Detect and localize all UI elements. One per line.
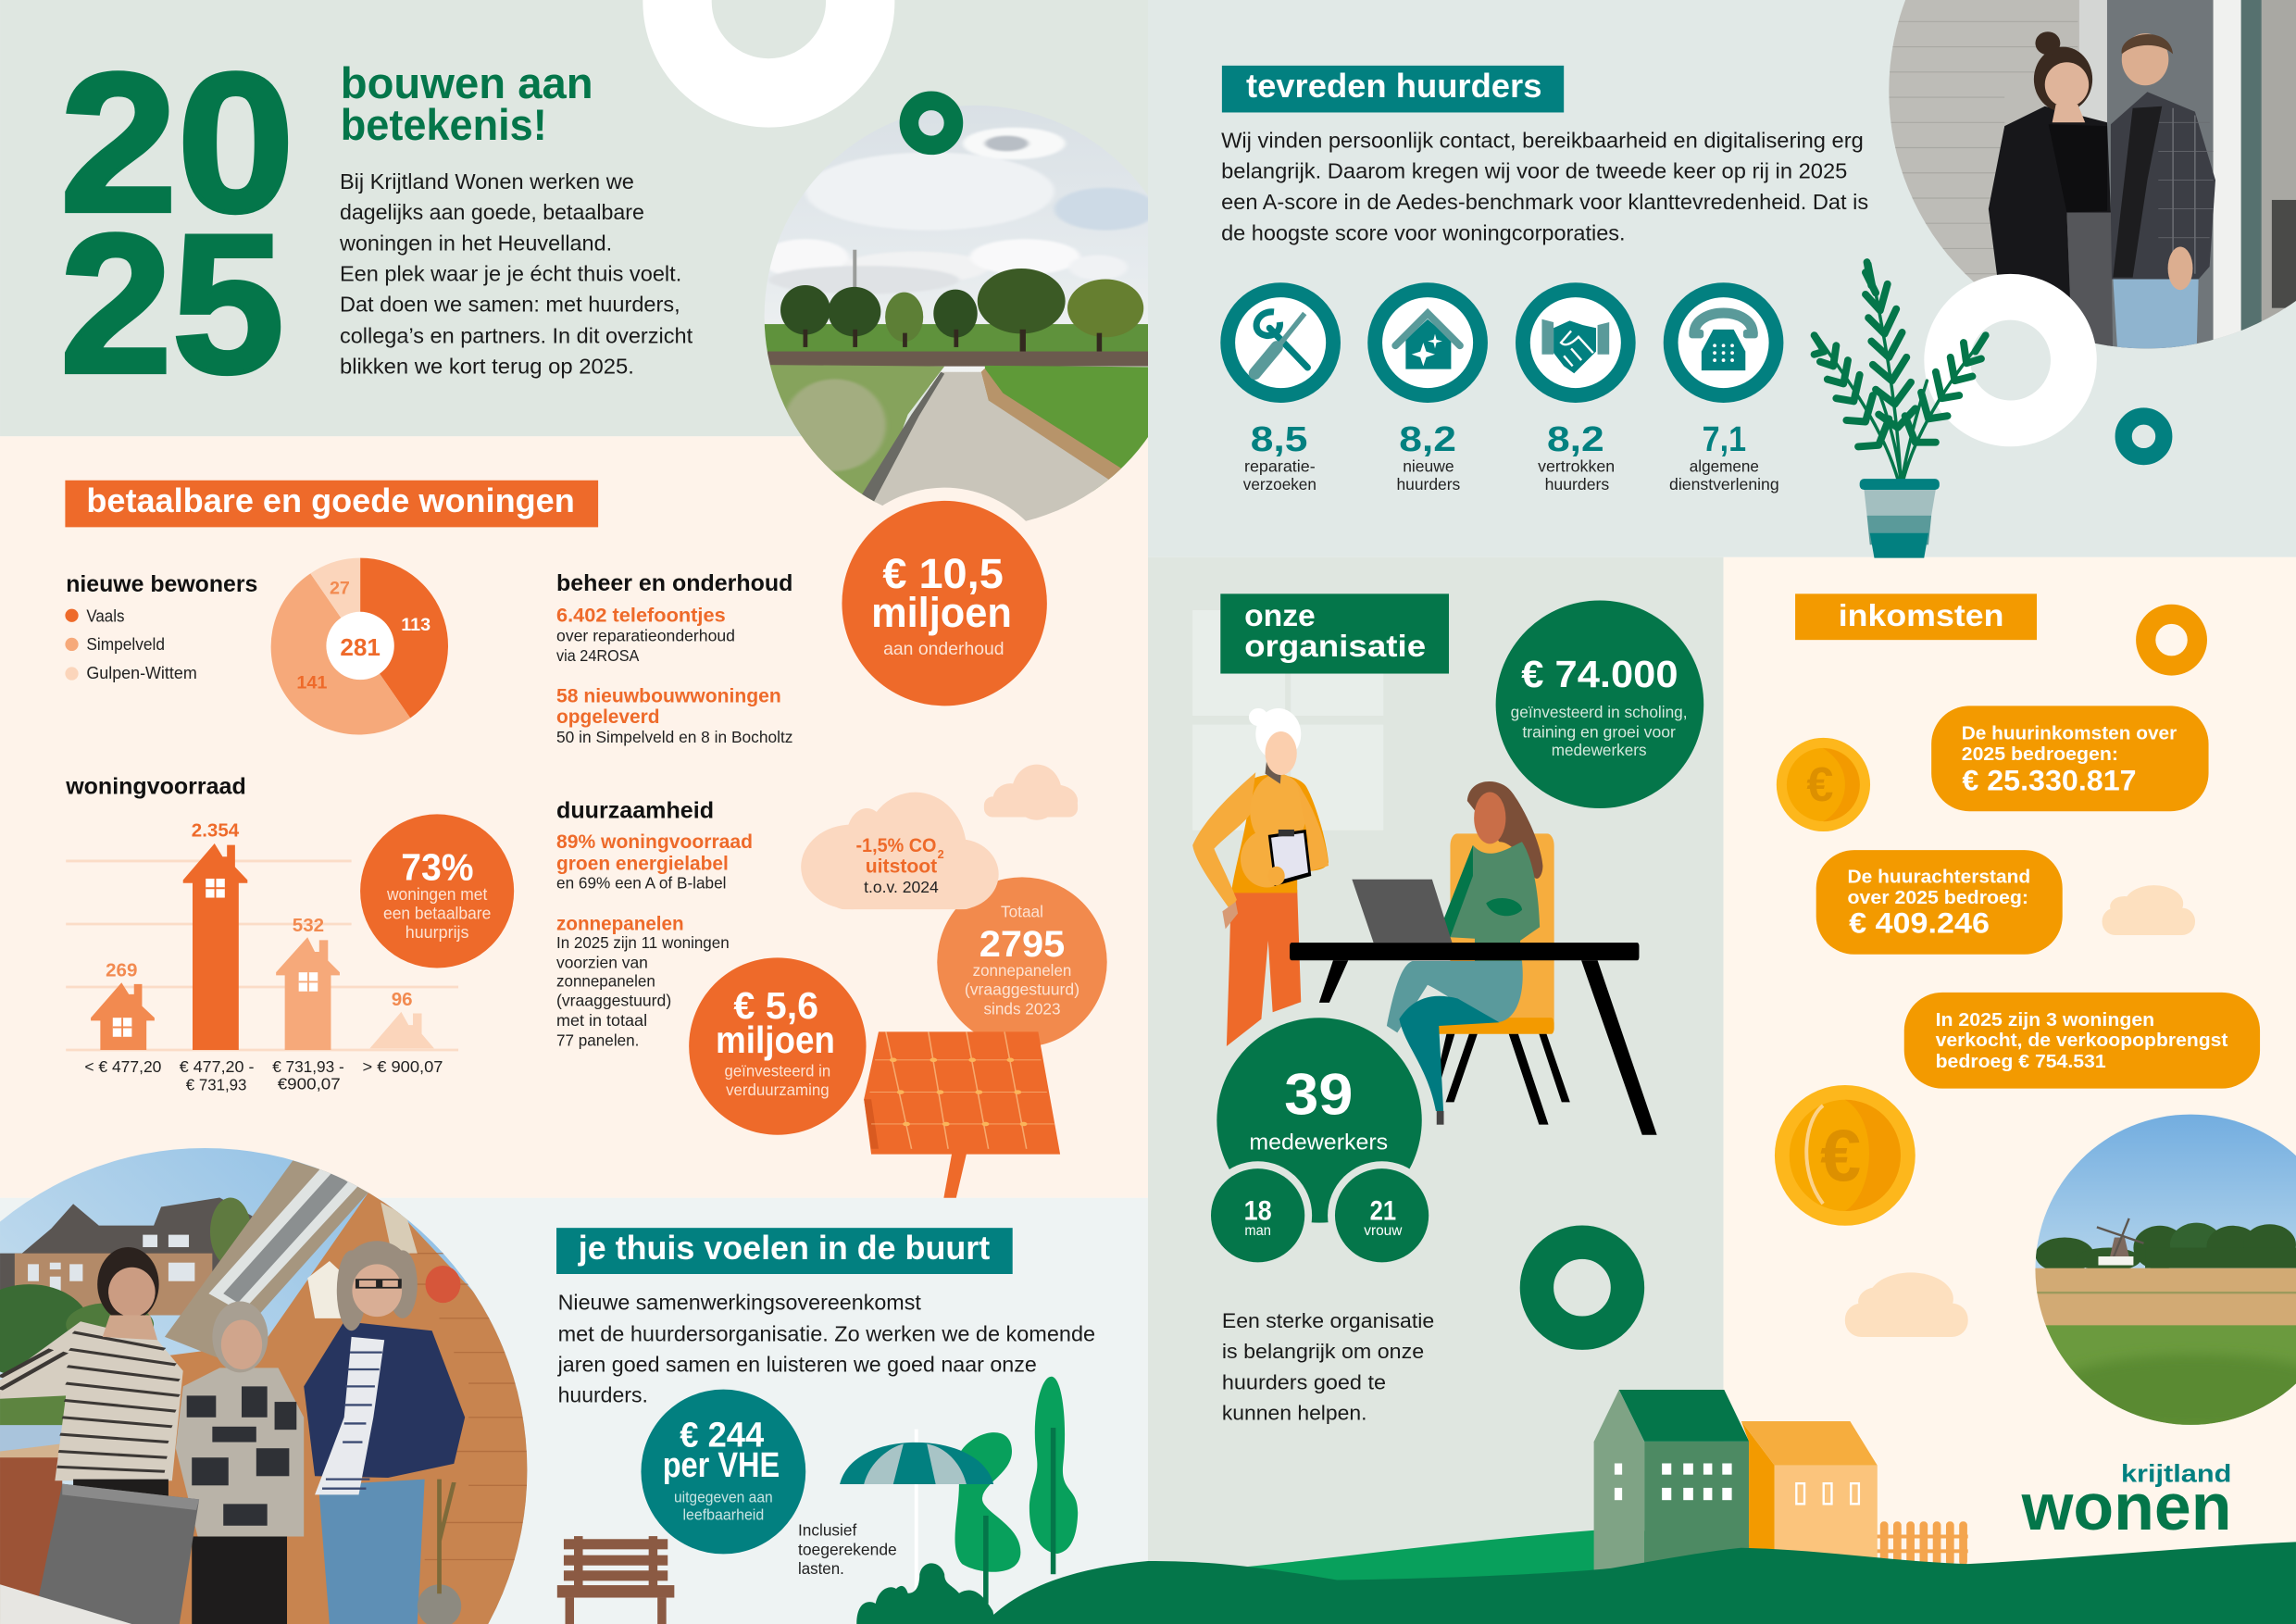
text block: duurzaamheid: 89% woningvoorraad — [556, 831, 753, 853]
chair — [33, 1484, 199, 1624]
text block: tevreden huurders: Wij vinden persoonlijk contact, bereikbaarheid en digitalisering erg — [1221, 129, 1864, 153]
text block: duurzaamheid: met in totaal — [556, 1011, 647, 1030]
text block: sterke organisatie — [1222, 1309, 1434, 1424]
text block: duurzaamheid: groen energielabel — [556, 852, 729, 874]
icon: parasol — [840, 1430, 993, 1624]
callout: 74.000: training en groei voor — [1522, 724, 1676, 742]
panel: top right background — [1148, 0, 2296, 557]
callout: 74.000 — [1496, 600, 1703, 808]
cloud callout: -1,5% CO2: 2 — [938, 848, 944, 861]
banner: betaalbare en goede woningen: betaalbare en goede woningen — [86, 481, 575, 519]
text block: sterke organisatie: Een sterke organisatie — [1222, 1309, 1434, 1332]
left woman — [0, 1321, 183, 1480]
icon: telephone — [1671, 290, 1777, 395]
callout: 5,6 miljoen: € 5,6 — [733, 984, 818, 1027]
photo: couple at front door — [1880, 0, 2296, 360]
chair — [1430, 833, 1570, 1125]
bubble: verkoop woningen: bedroeg € 754.531 — [1936, 1051, 2106, 1072]
score: algemene dienstverlening: 7,1 — [1703, 420, 1746, 459]
legend: nieuwe bewoners — [65, 571, 257, 682]
callout: 74.000: geïnvesteerd in scholing, — [1511, 704, 1688, 721]
icon: small euro coin: € — [1806, 758, 1833, 812]
axis labels: < € 477,20 — [84, 1057, 161, 1076]
axis labels: > € 900,07 — [362, 1057, 443, 1076]
text block: tevreden huurders — [1221, 129, 1868, 244]
teal ring — [2124, 416, 2164, 456]
man — [2113, 280, 2199, 348]
callout: totaal 2795 zonnepanelen: Totaal — [1001, 903, 1043, 921]
score: vertrokken huurders: vertrokken — [1538, 456, 1615, 475]
illustration: green house — [1594, 1390, 1749, 1574]
callout: 39 medewerkers: medewerkers — [1249, 1131, 1388, 1156]
chart: woningvoorraad house bars — [84, 820, 443, 1093]
right woman — [318, 1480, 425, 1624]
pie chart: nieuwe bewoners: 141 — [296, 672, 327, 693]
bar: house 96: 96 — [392, 989, 413, 1010]
banner: inkomsten: inkomsten — [1839, 599, 2003, 633]
banner: onze organisatie: organisatie — [1244, 630, 1426, 664]
centre woman — [192, 1536, 287, 1624]
callout: 10,5 miljoen: aan onderhoud — [883, 639, 1004, 659]
decorative white ring top — [678, 0, 860, 93]
intro text: collega’s en partners. In dit overzicht — [340, 323, 693, 347]
axis labels: € 731,93 - — [272, 1057, 344, 1076]
icon: bench — [557, 1536, 674, 1624]
score: nieuwe huurders — [1375, 290, 1480, 493]
callout: totaal 2795 zonnepanelen: 2795 — [980, 924, 1065, 965]
callout: 10,5 miljoen — [829, 488, 1060, 719]
banner: onze organisatie — [1220, 593, 1449, 674]
intro text — [339, 169, 693, 379]
panel: neighbourhood background — [0, 1198, 1148, 1624]
icon: small euro coin — [1777, 738, 1870, 831]
banner: tevreden huurders: tevreden huurders — [1246, 67, 1541, 105]
woman — [2066, 213, 2113, 346]
intro text: Een plek waar je je écht thuis voelt. — [340, 261, 681, 285]
amber ring — [2146, 614, 2197, 666]
text block: samenwerkingsovereenkomst: met de huurdersorganisatie. Zo werken we de komende — [558, 1321, 1095, 1345]
panel: income background — [1724, 557, 2296, 1624]
callout: 244 per VHE: € 244 — [680, 1417, 764, 1455]
big year 2025: 20 — [60, 33, 294, 254]
panel: organisation background — [1148, 557, 1724, 1624]
note: inclusief toegerekende lasten: toegerekende — [798, 1541, 897, 1559]
intro text: dagelijks aan goede, betaalbare — [340, 200, 644, 224]
score: reparatieverzoeken: 8,5 — [1251, 420, 1307, 459]
callout: 73% — [360, 814, 514, 968]
callout: 73%: woningen met — [386, 885, 487, 904]
callout: totaal 2795 zonnepanelen: sinds 2023 — [983, 1000, 1060, 1018]
text block: beheer en onderhoud — [556, 570, 792, 746]
score: nieuwe huurders: nieuwe — [1403, 456, 1454, 475]
bubble: huurachterstand: over 2025 bedroeg: — [1848, 887, 2028, 908]
text block: tevreden huurders: een A-score in de Aedes-benchmark voor klanttevredenheid. Dat is — [1221, 190, 1868, 214]
text block: beheer en onderhoud: beheer en onderhoud — [556, 570, 792, 596]
callout: 73%: huurprijs — [406, 923, 469, 942]
text block: sterke organisatie: kunnen helpen. — [1222, 1401, 1366, 1424]
callout: 5,6 miljoen — [689, 957, 867, 1135]
ground: light green hill — [1244, 1530, 1757, 1596]
text block: beheer en onderhoud: 50 in Simpelveld en 8 in Bocholtz — [556, 728, 792, 746]
text block: beheer en onderhoud: 6.402 telefoontjes — [556, 605, 726, 627]
icon: tree blob — [955, 1432, 1020, 1604]
ground: bushes — [856, 1563, 996, 1624]
legend: nieuwe bewoners: Gulpen-Wittem — [86, 664, 197, 682]
callout: 244 per VHE — [641, 1390, 805, 1554]
intro text: Dat doen we samen: met huurders, — [340, 293, 680, 317]
callout: 39 medewerkers: 18 — [1244, 1195, 1272, 1226]
icon: large euro coin — [1775, 1085, 1915, 1226]
callout: totaal 2795 zonnepanelen — [937, 877, 1107, 1047]
photo: three women on a balcony — [0, 1139, 556, 1624]
bar: house 269: 269 — [106, 960, 137, 981]
text block: beheer en onderhoud: 58 nieuwbouwwoningen — [556, 685, 781, 707]
heading: bouwen aan betekenis: betekenis! — [341, 101, 547, 150]
big year 2025 — [60, 33, 294, 415]
bar: house 532: 532 — [293, 915, 324, 936]
plant — [1815, 262, 1987, 558]
banner: inkomsten — [1795, 593, 2037, 640]
score: algemene dienstverlening: dienstverlening — [1669, 475, 1779, 493]
callout: 244 per VHE: leefbaarheid — [682, 1506, 764, 1524]
text block: beheer en onderhoud: over reparatieonderhoud — [556, 626, 735, 644]
intro text: Bij Krijtland Wonen werken we — [340, 169, 634, 194]
bar: house 96 — [369, 989, 434, 1048]
axis labels: € 731,93 — [186, 1075, 246, 1093]
bubble: verkoop woningen: verkocht, de verkoopopbrengst — [1936, 1030, 2228, 1051]
bubble: huurachterstand — [1816, 850, 2063, 955]
callout: 244 per VHE: uitgegeven aan — [674, 1489, 773, 1506]
banner: je thuis voelen in de buurt: je thuis voelen in de buurt — [578, 1229, 990, 1267]
text block: duurzaamheid: voorzien van — [556, 953, 648, 971]
bubble: huurinkomsten: De huurinkomsten over — [1962, 723, 2177, 744]
text block: duurzaamheid — [556, 798, 753, 1049]
text block: samenwerkingsovereenkomst: jaren goed samen en luisteren we goed naar onze — [557, 1353, 1037, 1377]
solar panel — [864, 1031, 1060, 1198]
callout: totaal 2795 zonnepanelen: (vraaggestuurd) — [965, 981, 1079, 999]
plant pot — [1860, 479, 1940, 558]
cloud callout: -1,5% CO2: t.o.v. 2024 — [864, 878, 939, 896]
text block: duurzaamheid: (vraaggestuurd) — [556, 992, 671, 1010]
score: nieuwe huurders: 8,2 — [1399, 420, 1456, 459]
text block: duurzaamheid: zonnepanelen — [556, 972, 655, 991]
callout: 73%: een betaalbare — [383, 904, 491, 922]
cloud — [1845, 1272, 1968, 1337]
green ring — [1537, 1243, 1628, 1333]
score: reparatieverzoeken: verzoeken — [1243, 475, 1316, 493]
bubble: huurinkomsten: 2025 bedroegen: — [1962, 743, 2118, 765]
callout: 5,6 miljoen: verduurzaming — [726, 1081, 830, 1099]
icon: tools — [1228, 290, 1333, 395]
photo: windmill landscape — [2028, 1106, 2296, 1428]
callout: 39 medewerkers — [1204, 1006, 1436, 1269]
text block: tevreden huurders: belangrijk. Daarom kregen wij voor de tweede keer op rij in 2025 — [1221, 159, 1847, 183]
callout: 39 medewerkers: vrouw — [1364, 1223, 1403, 1239]
callout: 39 medewerkers: 39 — [1284, 1063, 1353, 1128]
axis labels: €900,07 — [278, 1075, 341, 1093]
axis labels — [84, 1057, 443, 1093]
text block: samenwerkingsovereenkomst — [557, 1290, 1095, 1407]
icon: tall tree — [1029, 1377, 1078, 1574]
callout: 39 medewerkers: man — [1244, 1223, 1271, 1239]
intro text: blikken we kort terug op 2025. — [340, 355, 634, 379]
text block: duurzaamheid: 77 panelen. — [556, 1031, 639, 1049]
bar: house 532 — [276, 915, 340, 1050]
callout: 39 medewerkers: 21 — [1370, 1195, 1396, 1226]
icon: handshake — [1523, 290, 1628, 395]
standing woman — [1192, 708, 1329, 1046]
small green ring — [909, 101, 954, 145]
logo: krijtland wonen: wonen — [2021, 1471, 2232, 1544]
note: inclusief toegerekende lasten: lasten. — [798, 1559, 844, 1578]
pie chart: nieuwe bewoners: 113 — [401, 615, 430, 635]
icon: large euro coin: € — [1820, 1114, 1861, 1196]
pie chart: nieuwe bewoners: 27 — [330, 578, 350, 598]
seated woman — [1387, 781, 1542, 1125]
legend: nieuwe bewoners: Vaals — [86, 607, 124, 626]
heading: bouwen aan betekenis: bouwen aan — [341, 59, 593, 108]
cloud — [2103, 885, 2195, 935]
score: algemene dienstverlening — [1669, 290, 1779, 493]
bubble: huurachterstand: De huurachterstand — [1848, 867, 2030, 888]
text block: sterke organisatie: huurders goed te — [1222, 1370, 1386, 1393]
legend: nieuwe bewoners: Simpelveld — [86, 635, 165, 654]
illustration: fence — [1878, 1521, 1968, 1566]
text block: duurzaamheid: In 2025 zijn 11 woningen — [556, 933, 730, 952]
note: inclusief toegerekende lasten: Inclusief — [798, 1520, 856, 1539]
text block: sterke organisatie: is belangrijk om onze — [1222, 1340, 1424, 1363]
panel: affordable homes background — [0, 436, 1148, 1198]
text block: tevreden huurders: de hoogste score voor woningcorporaties. — [1221, 220, 1626, 244]
legend: nieuwe bewoners: nieuwe bewoners — [66, 571, 257, 597]
bar: house 2.354: 2.354 — [192, 820, 240, 842]
score: reparatieverzoeken: reparatie- — [1244, 456, 1316, 475]
bubble: verkoop woningen — [1904, 993, 2260, 1089]
bar: house 2.354 — [183, 820, 247, 1050]
text block: beheer en onderhoud: via 24ROSA — [556, 646, 640, 665]
bubble: huurinkomsten — [1931, 706, 2209, 811]
score: algemene dienstverlening: algemene — [1690, 456, 1759, 475]
heading: bouwen aan betekenis — [341, 59, 593, 150]
callout: 74.000: € 74.000 — [1521, 653, 1678, 695]
pie chart: nieuwe bewoners — [271, 558, 448, 735]
text block: duurzaamheid: zonnepanelen — [556, 912, 684, 934]
big year 2025: 25 — [60, 194, 284, 415]
score: reparatieverzoeken — [1228, 290, 1333, 493]
bubble: verkoop woningen: In 2025 zijn 3 woningen — [1936, 1009, 2154, 1031]
illustration: office scene — [1192, 610, 1657, 1135]
text block: duurzaamheid: duurzaamheid — [556, 798, 714, 824]
intro text: woningen in het Heuvelland. — [339, 231, 612, 255]
score: vertrokken huurders — [1523, 290, 1628, 493]
bar: house 269 — [91, 960, 155, 1050]
callout: 244 per VHE: per VHE — [663, 1446, 780, 1485]
logo: krijtland wonen: krijtland — [2121, 1460, 2231, 1488]
callout: 5,6 miljoen: geïnvesteerd in — [725, 1061, 830, 1080]
illustration: amber house — [1741, 1421, 1878, 1574]
white ring by plant — [1947, 297, 2074, 423]
text block: beheer en onderhoud: opgeleverd — [556, 706, 660, 728]
note: inclusief toegerekende lasten — [798, 1520, 897, 1578]
text block: samenwerkingsovereenkomst: Nieuwe samenwerkingsovereenkomst — [558, 1290, 921, 1314]
score: vertrokken huurders: huurders — [1545, 475, 1610, 493]
text block: duurzaamheid: en 69% een A of B-label — [556, 874, 726, 893]
score: nieuwe huurders: huurders — [1396, 475, 1461, 493]
text block: samenwerkingsovereenkomst: huurders. — [558, 1383, 648, 1407]
photo: country road — [765, 126, 1148, 521]
panel: top left background — [0, 0, 1148, 436]
bubble: huurinkomsten: € 25.330.817 — [1962, 763, 2137, 796]
cloud callout: -1,5% CO2: -1,5% CO — [855, 834, 936, 856]
axis labels: € 477,20 - — [180, 1057, 255, 1076]
banner: onze organisatie: onze — [1244, 599, 1316, 633]
callout: 73%: 73% — [401, 846, 474, 889]
small cloud — [984, 765, 1078, 820]
callout: totaal 2795 zonnepanelen: zonnepanelen — [973, 961, 1071, 980]
pie chart: nieuwe bewoners: 281 — [340, 633, 381, 661]
callout: 5,6 miljoen: miljoen — [716, 1018, 835, 1061]
callout: 74.000: medewerkers — [1552, 742, 1647, 759]
ground: dark green hill — [984, 1542, 2296, 1624]
callout: 10,5 miljoen: € 10,5 — [882, 549, 1004, 597]
bubble: huurachterstand: € 409.246 — [1849, 906, 1990, 939]
heading: woningvoorraad: woningvoorraad — [65, 774, 246, 800]
callout: 10,5 miljoen: miljoen — [871, 588, 1012, 636]
laptop and table — [1290, 880, 1657, 1135]
icon: house with sparkles — [1375, 290, 1480, 395]
cloud callout: -1,5% CO2: uitstoot — [866, 856, 937, 878]
score: vertrokken huurders: 8,2 — [1547, 420, 1604, 459]
cloud callout: -1,5% CO2 — [801, 793, 999, 909]
